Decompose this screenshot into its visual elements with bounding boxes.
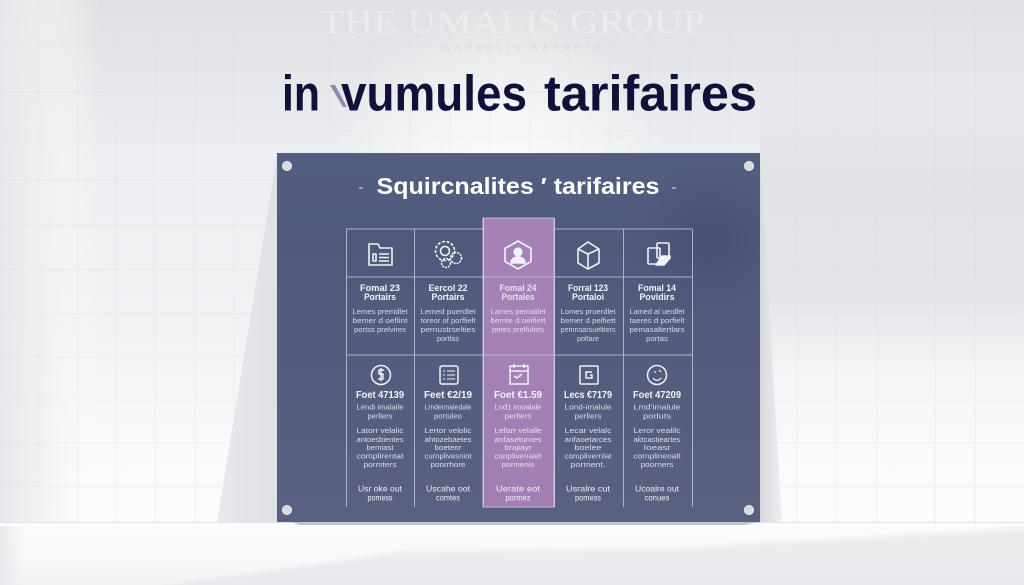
title [282,66,757,122]
column 5 pricing: cornplineoalt [634,452,682,460]
column 2 pricing: portuleo [434,412,462,420]
icon: calendar [510,364,528,384]
column 1 pricing [356,389,405,502]
column 1 features: Fomal 23 [360,283,400,293]
icon: list [440,366,458,384]
column 3 pricing: Uerate eot [496,484,541,494]
column 4 pricing: Lecs €7179 [564,389,612,401]
title: in [282,66,320,122]
icon: gears [436,242,462,268]
column 1 pricing: pormters [364,460,397,469]
icon: folder [369,244,392,265]
column 2 pricing: curnplivesniot [424,452,472,460]
column 2 features: Portairs [432,292,464,302]
column 2 features: Lemed puerdlet [420,309,476,316]
column 3 pricing: Foet €1.59 [494,389,542,401]
table grid [346,218,692,507]
column 1 features: bemer d oeflint [352,318,408,325]
faded brand name [320,4,705,54]
floor [0,522,1024,585]
column 1 pricing: Usr oke out [358,484,403,494]
column 1 features: Lemes premdlet [352,309,408,316]
icon: user hexagon [505,241,531,269]
column 2 pricing: poorrhore [430,460,466,469]
column 3 features: Lames pemalilet [490,309,546,316]
panel: pricing board [277,153,760,522]
column 1 features: portss prelvires [354,327,407,334]
column 2 features: portlas [437,336,460,343]
column 5 features: portas [646,336,669,343]
column 1 pricing: Foet 47139 [356,389,404,401]
column 3 pricing: Lnd1 imoalale [494,402,542,412]
column 5 pricing: Ucoalre out [635,484,680,494]
column 4 pricing: perliers [574,412,602,420]
column 2 pricing: Uscahe oot [426,484,471,494]
column 5 pricing: porluts [643,412,671,420]
column 1 pricing: bemiast [366,443,394,452]
column 2 pricing: Lmdeimaledale [424,402,472,412]
column 5 features: taeres d porfielt [630,318,685,325]
column 1 pricing: pomess [368,492,392,502]
icons row 2 [372,364,666,384]
faded tagline: GARBALIS SAFRETS [443,43,601,54]
column 1 features: Portairs [364,292,396,302]
column 4 features [560,283,616,343]
column 4 features: Portaloi [572,292,604,302]
faded brand name: THE UMALIS GROUP [320,4,705,41]
column 4 pricing: porment. [570,460,606,469]
column 1 features [352,283,408,334]
column 4 features: Forral 123 [568,283,608,293]
icon: smile badge [648,366,666,384]
column 1 pricing: complirentat [356,452,405,460]
icons row 1 [369,241,670,269]
column 5 pricing [633,389,682,502]
panel cast shadows [217,156,782,525]
column 5 pricing: aktcastieartes [634,435,681,444]
column 4 pricing: Lond-imalule [564,402,612,412]
column 3 features [490,283,546,334]
icon: coin [372,366,390,384]
column 5 features [630,283,685,343]
column 4 pricing: Lecar velalc [564,426,612,435]
column 2 pricing: ahtozebaetes [424,435,472,444]
column 5 pricing: poorners [640,460,674,469]
panel heading: - [358,179,364,196]
row 1 column text [352,283,685,343]
column 1 pricing: Latorr velalic [356,426,404,435]
column 3 pricing: Lefarr velalle [494,426,542,435]
column 3 pricing: pormez [506,492,530,502]
column 4 pricing: boelee [574,443,602,452]
column 4 pricing [564,389,612,502]
column 3 features: Portales [502,292,534,302]
column 2 pricing [424,389,472,502]
title accent mark [330,85,347,107]
title: tarifaires [544,66,757,122]
panel heading: Squircnalites ′ tarifaires [376,173,660,199]
column 3 features: bemte d oeifiett [490,318,546,325]
column 3 pricing: anfaseturnes [494,435,542,444]
column 5 pricing: Ioeasr [644,443,671,452]
column 2 pricing: Lertor velolic [424,426,472,435]
column 5 features: Lamed at uerdlet [630,309,685,316]
column 3 pricing: cunplivenaiet [494,452,542,460]
column 4 pricing: complivernlat [564,452,612,460]
column 5 features: Fomal 14 [638,283,676,293]
icon: square glyph [580,366,598,384]
column 1 pricing: Lendi imalaile [356,402,404,412]
row 2 column text [356,389,682,502]
column 4 features: pemnsarsueltiers [560,327,616,334]
column 2 features: toreor of porflielt [420,318,476,325]
column 2 features: Eercol 22 [428,283,468,293]
column 3 pricing: perliers [504,412,532,420]
icon: devices [648,243,670,265]
column 3 pricing: brajiayr [504,443,532,452]
column 5 features: Povidirs [640,292,674,302]
column 5 features: pemasaltertlars [630,327,685,334]
column 2 pricing: boeteor [434,443,462,452]
column 1 pricing: perliers [368,412,393,420]
panel heading: - [672,179,676,196]
column 4 pricing: pomess [575,492,601,502]
column 1 pricing: antoesbientes [356,435,404,444]
column 4 pricing: anfaoetarces [564,435,612,444]
column 4 features: bemer d pelfiett [560,318,616,325]
column 3 pricing [494,389,542,502]
column 4 features: Lomes proerdlet [560,309,616,316]
column 2 pricing: comtes [436,492,460,502]
highlighted column [483,218,554,507]
column 2 pricing: Feet €2/19 [424,389,472,401]
column 4 pricing: Usralre cut [566,484,611,494]
column 5 pricing: conues [644,492,670,502]
column 2 features [420,283,476,343]
column 5 pricing: Lmd'imalule [634,402,680,412]
title: vumules [341,66,527,122]
screws [282,162,754,514]
column 3 features: Fomal 24 [500,283,536,293]
icon: cube [578,242,599,269]
column 2 features: pernustrselties [420,327,476,334]
column 5 pricing: Leror vealilc [634,426,681,435]
column 5 pricing: Foet 47209 [633,389,681,401]
column 4 features: poltare [577,336,599,343]
column 3 pricing: pormenis [502,460,535,469]
column 3 features: peres prelfulres [492,327,545,334]
